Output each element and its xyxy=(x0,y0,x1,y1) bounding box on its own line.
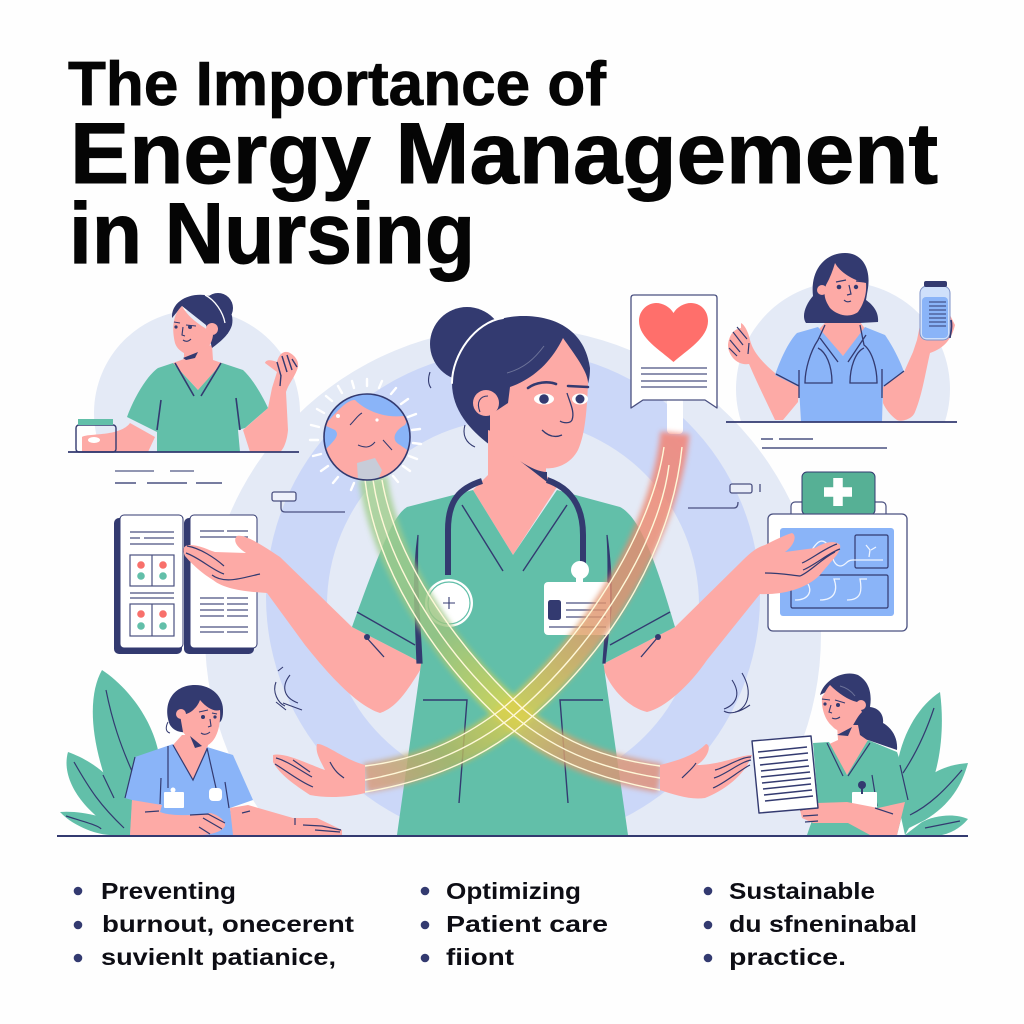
panel: bottom-right nurse xyxy=(752,674,968,835)
headband xyxy=(452,318,503,383)
face xyxy=(173,306,218,360)
face xyxy=(822,685,866,736)
band glow from heart card xyxy=(365,433,675,778)
neck xyxy=(827,725,870,775)
hair xyxy=(452,316,590,445)
scrub details xyxy=(357,505,670,803)
bullet column 1: Preventing xyxy=(101,878,236,904)
callout tag right xyxy=(688,484,760,508)
bullet column 3: du sfneninabal xyxy=(729,911,917,937)
scrubs xyxy=(125,744,253,835)
neck xyxy=(173,345,222,392)
text lines xyxy=(761,439,887,448)
bullet column 1 xyxy=(74,878,354,970)
scrubs xyxy=(775,327,904,422)
hair xyxy=(804,253,878,323)
hair xyxy=(172,293,233,348)
neck xyxy=(473,430,557,555)
scrubs xyxy=(127,363,268,452)
central nurse xyxy=(183,307,840,835)
band highlights xyxy=(365,447,682,792)
arms xyxy=(130,800,225,835)
baseline xyxy=(57,835,968,837)
hair xyxy=(167,685,223,732)
raised arm and fist xyxy=(243,352,298,452)
neck xyxy=(173,735,210,780)
arm holding paper xyxy=(800,802,905,835)
ID badges xyxy=(164,788,222,808)
panel: vitals monitor xyxy=(768,472,907,631)
title: The Importance of xyxy=(68,50,606,119)
globe rays xyxy=(310,379,421,490)
bun xyxy=(430,307,504,381)
panel: open book xyxy=(114,515,257,654)
panel: bottom-left nurse xyxy=(60,670,342,835)
bullet column 1: burnout, onecerent xyxy=(102,911,354,937)
globe icon xyxy=(310,379,421,490)
status grid top xyxy=(130,555,174,586)
neck xyxy=(818,300,866,356)
scrubs xyxy=(352,490,675,835)
ID badge xyxy=(544,561,610,635)
bullet column 2: Optimizing xyxy=(446,878,581,904)
bullet column 2 xyxy=(421,878,608,970)
first-aid kit xyxy=(802,472,875,515)
plant right xyxy=(895,692,968,835)
jar xyxy=(76,419,116,452)
clipboard paper xyxy=(752,736,818,813)
band glow from globe xyxy=(373,478,660,778)
medicine bottle xyxy=(920,281,950,340)
stethoscope xyxy=(448,480,583,575)
book right text lines xyxy=(200,531,248,632)
chest piece xyxy=(425,579,473,627)
title: Energy Management xyxy=(70,106,938,202)
face xyxy=(166,700,220,748)
left arm and fist xyxy=(728,323,799,420)
motion marks left xyxy=(275,667,302,710)
bullet column 2: fiiont xyxy=(446,944,514,970)
ID badge xyxy=(852,781,877,808)
face xyxy=(817,263,866,323)
panel: top-left nurse xyxy=(68,293,300,484)
heart xyxy=(639,303,708,362)
heart report card xyxy=(631,295,717,434)
stethoscope and collar xyxy=(776,325,904,398)
bullet column 2: Patient care xyxy=(446,911,608,937)
scrubs xyxy=(807,740,908,835)
bullet column 3: Sustainable xyxy=(729,878,875,904)
text lines xyxy=(115,470,194,472)
motion marks right xyxy=(724,673,750,713)
status grid bottom xyxy=(130,604,174,636)
panel: top-right nurse xyxy=(726,253,957,449)
right arm xyxy=(883,315,955,421)
open hand lower right xyxy=(660,744,752,798)
book left text lines xyxy=(130,532,174,598)
bullet column 1: suvienlt patianice, xyxy=(101,944,336,970)
energy bands xyxy=(365,433,682,792)
title xyxy=(68,50,938,282)
callout tag left xyxy=(272,492,345,512)
plant left xyxy=(60,670,170,835)
forearm resting xyxy=(82,423,155,452)
bullet column 3 xyxy=(704,878,917,970)
concentric background circles xyxy=(206,333,821,835)
open hand lower left xyxy=(273,744,365,797)
arm left raised xyxy=(183,536,422,713)
arm right raised xyxy=(603,533,840,712)
screen xyxy=(780,528,894,616)
face xyxy=(429,338,588,482)
hair back xyxy=(820,674,897,750)
bullet column 3: practice. xyxy=(729,944,846,970)
title: in Nursing xyxy=(69,186,475,282)
